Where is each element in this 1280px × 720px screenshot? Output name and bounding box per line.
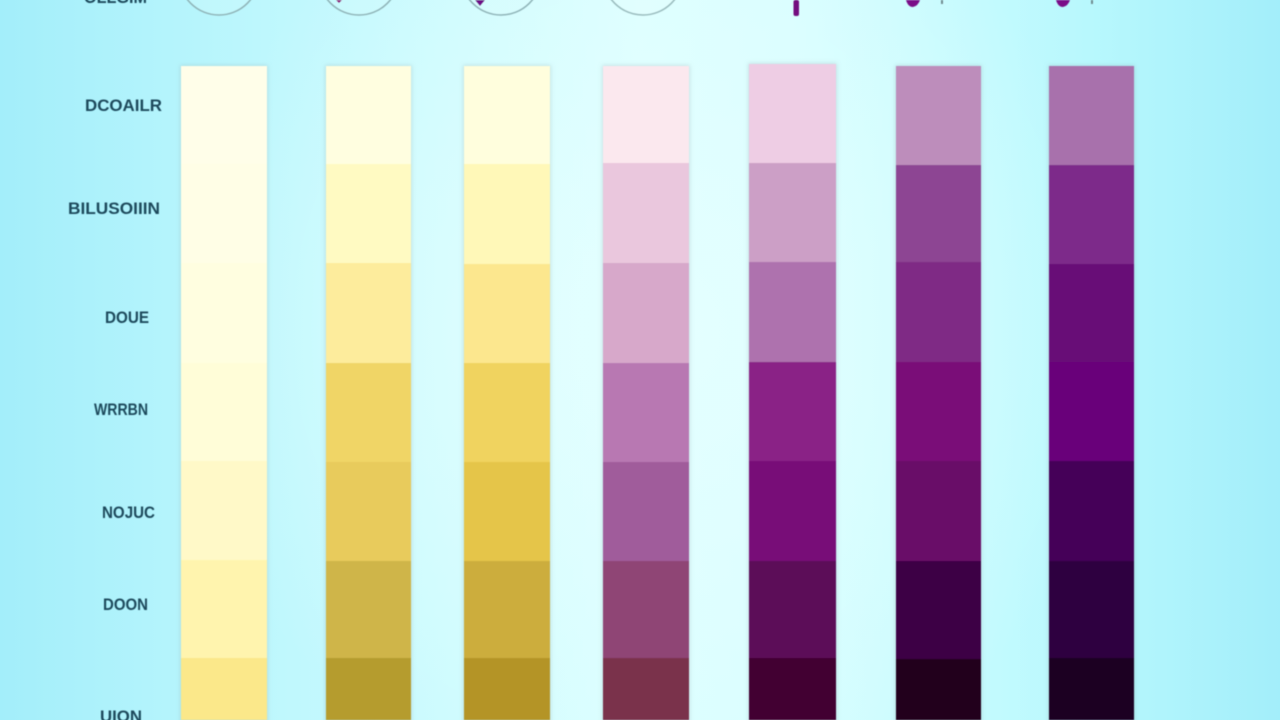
icon: purple drop 1 [906,0,943,7]
column 4: pink to maroon [603,66,689,720]
label: row 2: BILUSOIIIN [68,199,160,218]
icon: purple drop 2 [1056,0,1093,7]
row labels [68,0,162,720]
icon: circle 3 with purple mark [461,0,541,15]
colour columns [181,64,1134,720]
label: row 6: DOON [103,595,148,614]
icon: circle 1 [179,0,259,15]
label: row 1: DCOAILR [85,96,162,115]
column 1: pale yellow [181,66,267,720]
column 5: pink to dark purple [749,64,836,720]
column shadows [180,63,1135,720]
icon: purple stem [794,0,799,16]
label: row 3: DOUE [105,308,149,327]
label: row 4: WRRBN [94,400,148,419]
label: row 5: NOJUC [102,503,155,522]
column 2: yellow to ochre [326,66,411,720]
icon: circle 2 with purple mark [319,0,399,15]
column 7: purple to near black [1049,66,1134,720]
column 6: mauve to near black [896,66,981,720]
column 3: yellow to ochre [464,66,550,720]
icon: circle 4 [603,0,683,15]
top row of cropped circle icons [179,0,1093,16]
